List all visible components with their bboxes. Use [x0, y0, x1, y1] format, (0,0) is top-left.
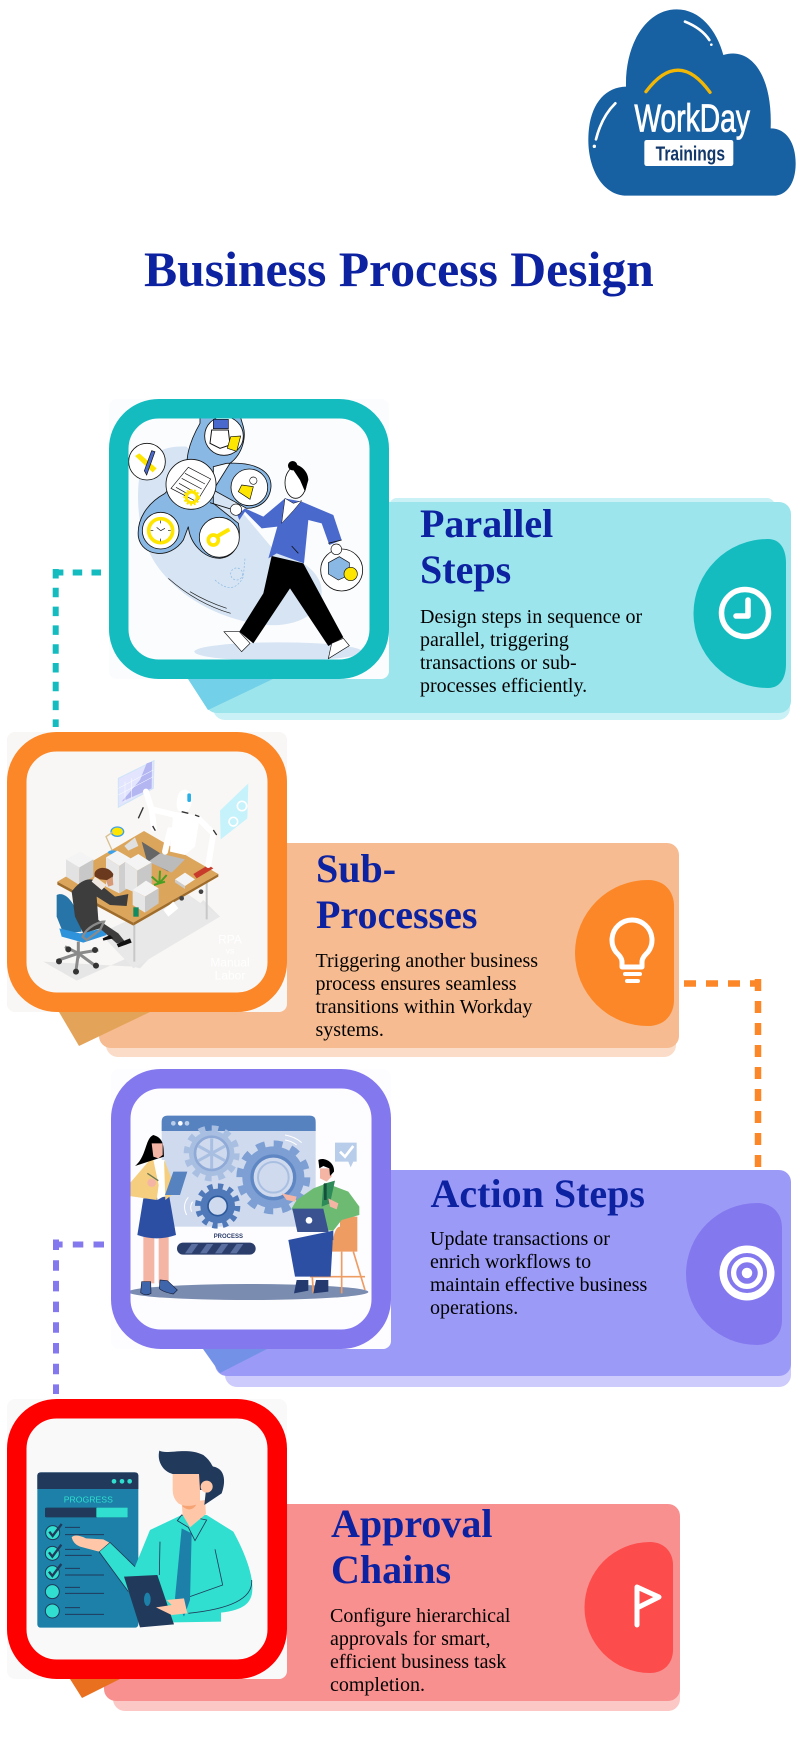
logo: WorkDay Trainings cloud: WorkDay [634, 96, 750, 140]
text: approval chains description: efficient business task [330, 1651, 506, 1673]
frame: teal image border [119, 409, 379, 669]
heading: parallel steps: Steps [420, 547, 511, 592]
text: parallel steps description: Design steps in sequence or [420, 606, 642, 628]
text: approval chains description: completion. [330, 1674, 425, 1696]
heading: approval chains: Chains [331, 1547, 451, 1592]
icon: clock [694, 539, 786, 688]
connector: purple dashed line [53, 1240, 104, 1394]
text: action steps description: enrich workflows to [430, 1251, 591, 1273]
icon: light bulb [575, 880, 674, 1026]
title: Business Process Design [144, 242, 654, 297]
heading: approval chains: Approval [331, 1501, 493, 1546]
text: sub-processes description: systems. [316, 1019, 384, 1041]
illustration: manual worker and robot at desk: vs [226, 945, 235, 955]
icon: flag [584, 1542, 673, 1673]
heading: parallel steps: Parallel [420, 501, 553, 546]
illustration: man presenting progress checklist: PROGRESS [64, 1495, 113, 1505]
illustration: team working with gears [128, 1116, 368, 1300]
illustration: man presenting progress checklist [37, 1451, 252, 1628]
illustration: manual worker and robot at desk [43, 761, 250, 982]
text: sub-processes description: transitions within Workday [316, 996, 532, 1018]
frame: orange image border [17, 742, 277, 1002]
illustration: manual worker and robot at desk: RPA [218, 932, 242, 946]
text: action steps description: Update transactions or [430, 1228, 610, 1250]
text: parallel steps description: parallel, triggering [420, 629, 569, 651]
illustration: team working with gears: PROCESS [214, 1234, 243, 1240]
text: action steps description: maintain effective business [430, 1274, 648, 1296]
icon: target [686, 1203, 782, 1345]
logo: WorkDay Trainings cloud [588, 9, 796, 196]
illustration: manual worker and robot at desk: Labor [215, 968, 245, 982]
panel: approval chains [7, 1399, 680, 1711]
text: sub-processes description: Triggering another business [316, 950, 538, 972]
heading: action steps: Action Steps [430, 1171, 645, 1216]
panel: sub-processes [7, 732, 679, 1057]
text: approval chains description: approvals for smart, [330, 1628, 491, 1650]
heading: sub-processes: Sub- [316, 846, 396, 891]
logo: WorkDay Trainings cloud: Trainings [656, 142, 725, 165]
text: parallel steps description: processes efficiently. [420, 675, 587, 697]
connector: orange dashed line [684, 979, 758, 1168]
frame: red image border [17, 1409, 277, 1669]
panel: parallel steps [109, 399, 791, 720]
panel: action steps [111, 1069, 791, 1387]
frame: purple image border [121, 1079, 381, 1339]
illustration: man juggling process icons [129, 413, 363, 661]
text: approval chains description: Configure hierarchical [330, 1605, 510, 1627]
connector: teal dashed line [53, 569, 101, 727]
text: parallel steps description: transactions or sub- [420, 652, 577, 674]
illustration: manual worker and robot at desk: Manual [210, 956, 250, 970]
text: action steps description: operations. [430, 1297, 518, 1319]
heading: sub-processes: Processes [316, 892, 477, 937]
text: sub-processes description: process ensures seamless [316, 973, 517, 995]
